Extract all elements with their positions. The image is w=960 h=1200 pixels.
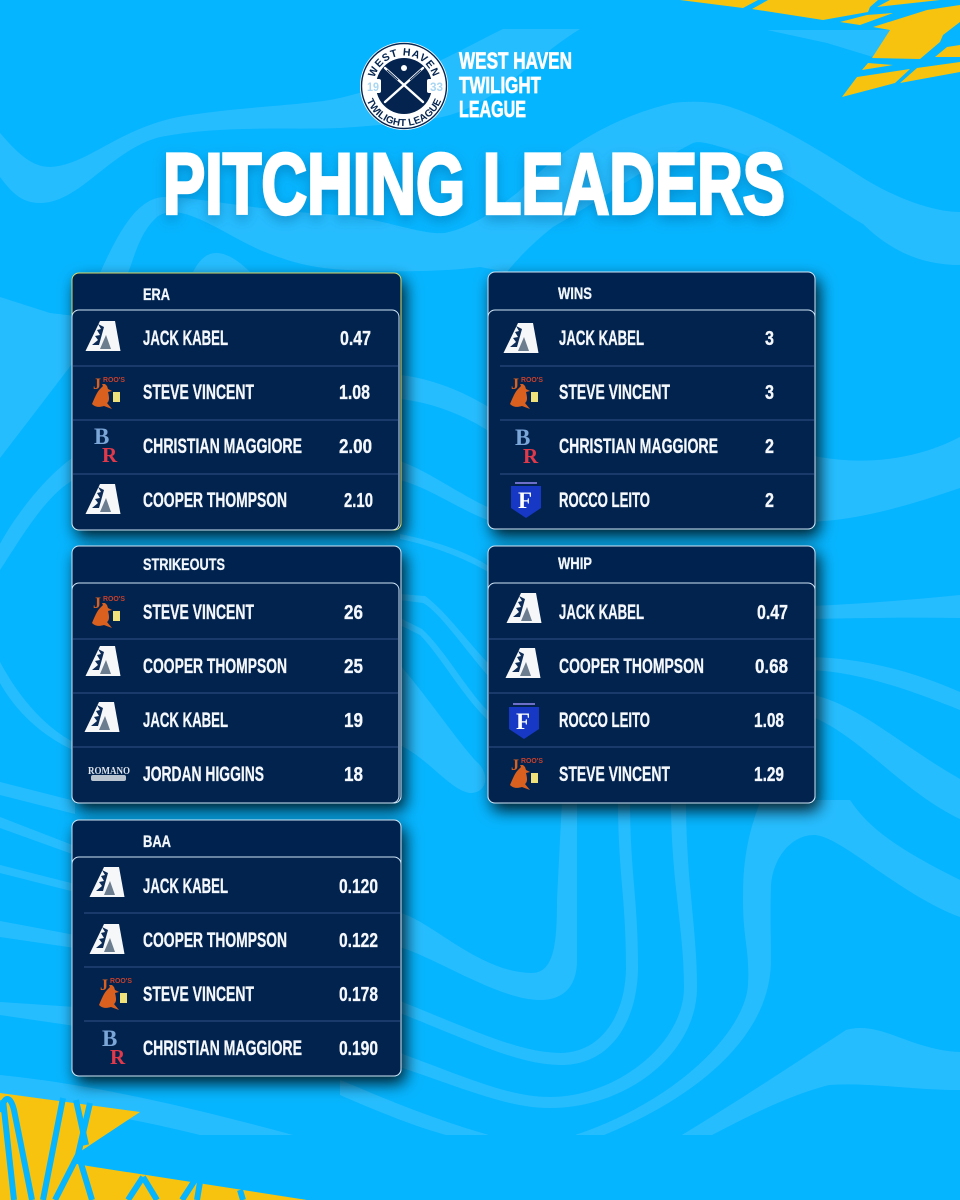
row: Cooper Thompson: [506, 648, 788, 678]
row: Jack Kabel: [504, 323, 774, 353]
panel: ERA: [72, 273, 401, 530]
row: Jack Kabel: 0.120: [339, 876, 378, 898]
row: Jack Kabel: 0.47: [757, 602, 788, 624]
league name: TWILIGHT: [459, 72, 541, 98]
icon: BR: R: [110, 1045, 126, 1069]
row: Cooper Thompson: 2.10: [344, 490, 373, 512]
icon: Arizona A: [86, 321, 120, 351]
row: Jordan Higgins: 18: [344, 764, 363, 786]
panel: WHIP: [488, 546, 815, 803]
row: Cooper Thompson: [90, 924, 378, 954]
row: Jack Kabel: 19: [344, 710, 363, 732]
row: Christian Maggiore: [515, 425, 774, 468]
row: Cooper Thompson: 0.122: [339, 930, 378, 952]
heading: BAA: BAA: [143, 833, 171, 851]
icon: F shield: [509, 703, 539, 739]
row: Cooper Thompson: 25: [344, 656, 363, 678]
icon: BR: B: [515, 425, 530, 450]
row: Jack Kabel: [90, 867, 378, 898]
icon: Arizona A: [504, 323, 538, 353]
row: Steve Vincent: 1.29: [754, 764, 784, 786]
icon: J Roo's: ROO'S: [103, 377, 125, 384]
row: Steve Vincent: [92, 376, 370, 409]
row: Christian Maggiore: 2: [765, 436, 774, 458]
icon: Arizona A: [506, 593, 542, 623]
heading: Wins: WINS: [558, 285, 592, 303]
row: Steve Vincent: [510, 376, 774, 409]
icon: F shield: F: [518, 488, 532, 513]
icon: Romano: [88, 765, 130, 781]
league name: LEAGUE: [459, 96, 526, 122]
league logo: 19: [367, 80, 379, 94]
icon: J Roo's: [99, 977, 132, 1010]
row: Steve Vincent: [99, 977, 378, 1010]
gold brush accent bottom left: [0, 1093, 307, 1200]
icon: F shield: F: [516, 709, 530, 734]
row: Christian Maggiore: CHRISTIAN MAGGIORE: [143, 1037, 302, 1060]
row: Christian Maggiore: [102, 1026, 378, 1069]
icon: J Roo's: ROO'S: [521, 377, 543, 384]
row: Cooper Thompson: [86, 646, 363, 678]
heading: Strikeouts: STRIKEOUTS: [143, 556, 225, 574]
row: Jack Kabel: 0.47: [340, 328, 371, 350]
icon: J Roo's: J: [100, 977, 108, 994]
gold brush accent top right: [680, 0, 960, 97]
row: Christian Maggiore: 0.190: [339, 1038, 378, 1060]
row: Cooper Thompson: [86, 484, 373, 514]
row: Christian Maggiore: CHRISTIAN MAGGIORE: [559, 435, 718, 458]
icon: Arizona A: [86, 484, 120, 514]
league logo: 33: [430, 80, 443, 94]
league name: WEST HAVEN: [459, 48, 572, 74]
row: Jack Kabel: [86, 321, 371, 351]
icon: Arizona A: [506, 648, 540, 678]
row: Rocco Leito: [511, 482, 774, 518]
icon: BR: [515, 425, 539, 468]
icon: BR: B: [94, 424, 109, 449]
row: Christian Maggiore: CHRISTIAN MAGGIORE: [143, 435, 302, 458]
row: Jack Kabel: [506, 593, 788, 624]
icon: Romano: ROMANO: [88, 765, 130, 777]
row: Steve Vincent: STEVE VINCENT: [559, 763, 670, 786]
row: Christian Maggiore: 2.00: [339, 436, 372, 458]
row: Cooper Thompson: COOPER THOMPSON: [559, 655, 704, 678]
icon: Arizona A: [86, 646, 120, 676]
icon: BR: [94, 424, 118, 467]
row: Jack Kabel: [84, 702, 363, 732]
row: Rocco Leito: [509, 703, 784, 739]
icon: Arizona A: [90, 867, 124, 897]
row: Steve Vincent: [510, 757, 784, 790]
row: Jack Kabel: JACK KABEL: [143, 875, 228, 898]
row: Steve Vincent: STEVE VINCENT: [143, 601, 254, 624]
icon: J Roo's: J: [511, 757, 519, 774]
icon: J Roo's: ROO'S: [103, 596, 125, 603]
icon: J Roo's: [510, 376, 543, 409]
icon: J Roo's: [92, 376, 125, 409]
icon: BR: R: [523, 444, 539, 468]
row: Rocco Leito: 1.08: [754, 710, 784, 732]
row: Steve Vincent: STEVE VINCENT: [143, 381, 254, 404]
icon: J Roo's: J: [511, 376, 519, 393]
icon: J Roo's: ROO'S: [110, 978, 132, 985]
icon: J Roo's: [510, 757, 543, 790]
row: Steve Vincent: 3: [765, 382, 774, 404]
icon: Arizona A: [90, 924, 124, 954]
league logo: TWILIGHT LEAGUE: [368, 98, 442, 126]
row: Steve Vincent: [92, 595, 363, 628]
row: Jack Kabel: JACK KABEL: [559, 601, 644, 624]
icon: F shield: [511, 482, 541, 518]
row: Jordan Higgins: [88, 763, 363, 786]
row: Rocco Leito: ROCCO LEITO: [559, 489, 650, 512]
row: Steve Vincent: 0.178: [339, 984, 378, 1006]
row: Steve Vincent: STEVE VINCENT: [143, 983, 254, 1006]
panel: Strikeouts: [72, 546, 401, 803]
league logo: WEST HAVEN: [368, 48, 440, 76]
icon: BR: R: [102, 443, 118, 467]
row: Cooper Thompson: COOPER THOMPSON: [143, 489, 287, 512]
icon: J Roo's: J: [93, 595, 101, 612]
icon: BR: [102, 1026, 126, 1069]
panel: BAA: [72, 820, 401, 1076]
row: Jack Kabel: 3: [765, 328, 774, 350]
row: Cooper Thompson: COOPER THOMPSON: [143, 655, 287, 678]
row: Steve Vincent: 1.08: [339, 382, 370, 404]
icon: J Roo's: [92, 595, 125, 628]
row: Rocco Leito: 2: [765, 490, 774, 512]
league logo: [360, 42, 448, 130]
row: Rocco Leito: ROCCO LEITO: [559, 709, 650, 732]
row: Steve Vincent: STEVE VINCENT: [559, 381, 670, 404]
icon: Arizona A: [84, 702, 120, 732]
panel: Wins: [488, 272, 815, 529]
row: Jack Kabel: JACK KABEL: [143, 327, 228, 350]
icon: J Roo's: ROO'S: [521, 758, 543, 765]
row: Jordan Higgins: JORDAN HIGGINS: [143, 763, 264, 786]
row: Christian Maggiore: [94, 424, 372, 467]
row: Jack Kabel: JACK KABEL: [143, 709, 228, 732]
row: Jack Kabel: JACK KABEL: [559, 327, 644, 350]
icon: J Roo's: J: [93, 376, 101, 393]
icon: BR: B: [102, 1026, 117, 1051]
row: Cooper Thompson: 0.68: [755, 656, 788, 678]
league name: [459, 48, 572, 122]
row: Cooper Thompson: COOPER THOMPSON: [143, 929, 287, 952]
heading: ERA: ERA: [143, 286, 170, 304]
heading: WHIP: WHIP: [558, 555, 592, 573]
row: Steve Vincent: 26: [344, 602, 363, 624]
